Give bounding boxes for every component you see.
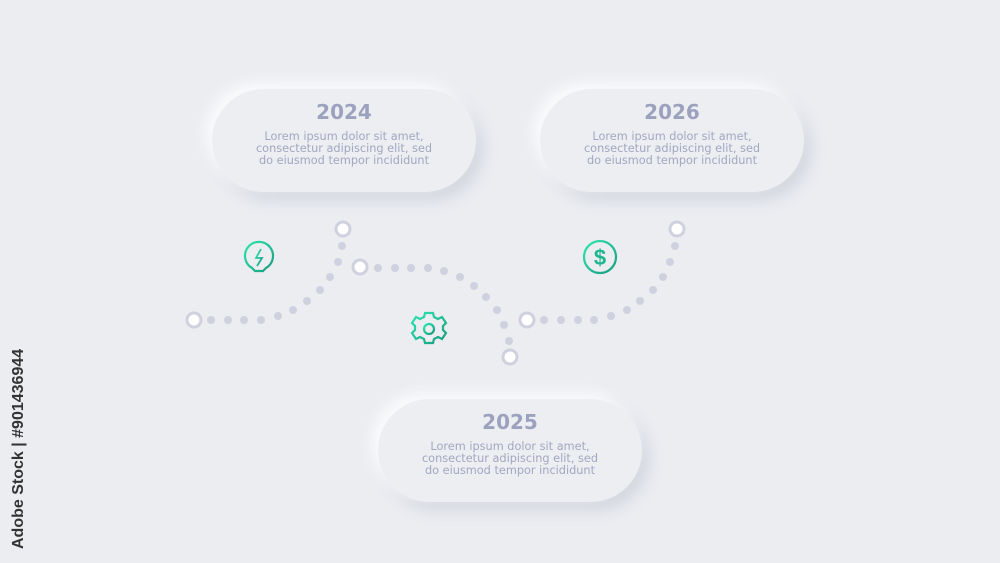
icon: gear — [412, 313, 446, 343]
panel: 2024: do eiusmod tempor incididunt — [259, 154, 429, 167]
heading: 2025: 2025 — [482, 410, 538, 434]
panel: 2026 — [540, 89, 804, 192]
panel: 2024: Lorem ipsum dolor sit amet, — [264, 130, 424, 143]
panel: 2026: Lorem ipsum dolor sit amet, — [592, 130, 752, 143]
icon: lightbulb — [245, 242, 273, 276]
dotted path 1 — [207, 242, 346, 324]
icon: dollar — [584, 241, 616, 273]
panel: 2025: consectetur adipiscing elit, sed — [422, 452, 598, 465]
panel: 2024: consectetur adipiscing elit, sed — [256, 142, 432, 155]
panel: 2024 — [212, 89, 476, 192]
panel: 2026: do eiusmod tempor incididunt — [587, 154, 757, 167]
panel: 2025 — [378, 399, 642, 502]
dotted path 3 — [540, 242, 679, 324]
panel: 2025: do eiusmod tempor incididunt — [425, 464, 595, 477]
nodes — [187, 222, 684, 364]
dotted path 2 — [374, 264, 513, 345]
heading: 2026: 2026 — [644, 100, 700, 124]
panel: 2025: Lorem ipsum dolor sit amet, — [430, 440, 590, 453]
icon: dollar: $ — [594, 245, 606, 270]
heading: 2024: 2024 — [316, 100, 372, 124]
panel: 2026: consectetur adipiscing elit, sed — [584, 142, 760, 155]
watermark text: Adobe Stock | #901436944 — [10, 349, 27, 549]
